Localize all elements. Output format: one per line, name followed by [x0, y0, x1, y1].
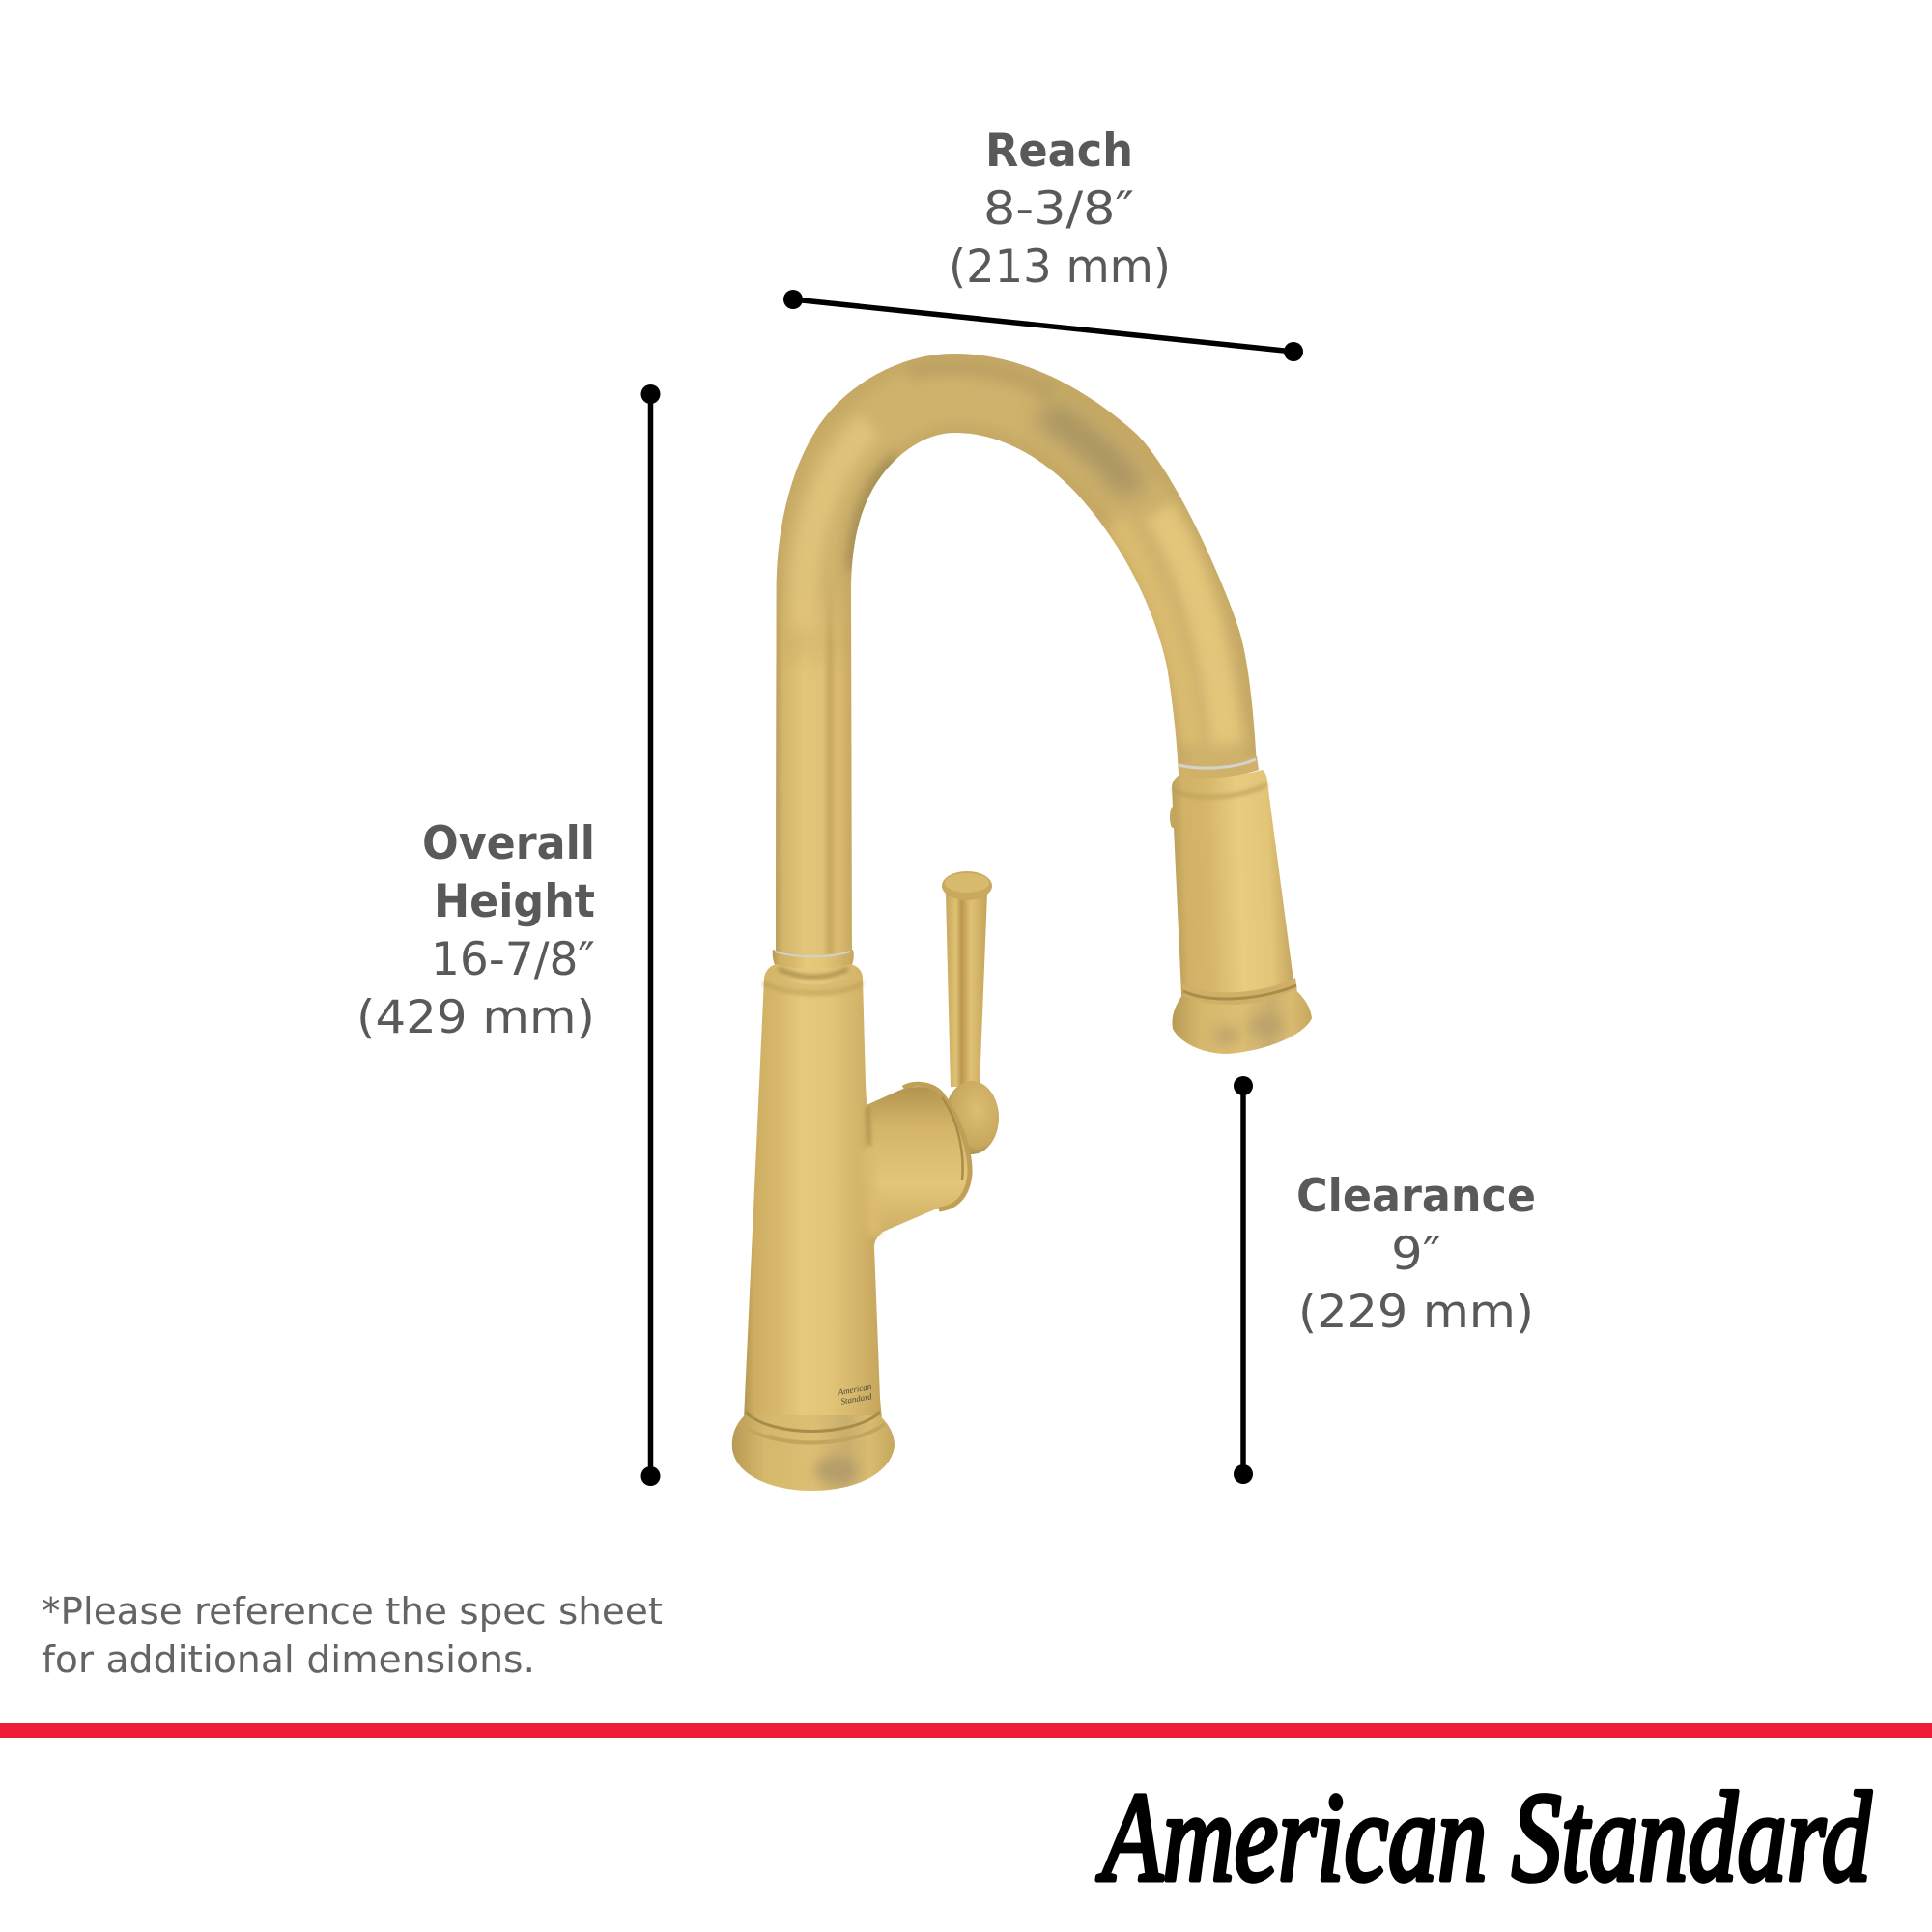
label: reach: Reach: [985, 125, 1133, 178]
label: overall height: (429 mm): [356, 991, 595, 1044]
label: clearance: (229 mm): [1298, 1286, 1534, 1339]
label: clearance: [1296, 1170, 1536, 1339]
icon: small logo on base: American: [837, 1381, 872, 1397]
label: reach: (213 mm): [949, 241, 1171, 294]
icon: handle arm: [867, 1084, 970, 1247]
red divider bar: [0, 1723, 1932, 1738]
icon: handle knob: [945, 1081, 999, 1154]
dimension line: overall height: [641, 384, 661, 1486]
icon: small logo on base: [837, 1381, 874, 1406]
label: overall height: Overall: [422, 817, 595, 870]
footnote: for additional dimensions.: [42, 1638, 535, 1681]
label: clearance: Clearance: [1296, 1170, 1536, 1223]
footnote: [42, 1590, 663, 1681]
icon: faucet body: [744, 964, 882, 1420]
icon: base flare: [732, 1412, 895, 1491]
label: overall height: [356, 817, 595, 1044]
icon: spray head: [1170, 756, 1297, 1014]
faucet illustration: [732, 354, 1312, 1491]
label: clearance: 9″: [1391, 1228, 1441, 1281]
icon: faucet collar: [773, 950, 854, 972]
icon: spray head flare: [1172, 989, 1312, 1054]
label: overall height: 16-7/8″: [431, 933, 595, 986]
label: overall height: Height: [434, 875, 595, 928]
dimension line: reach: [783, 290, 1303, 361]
icon: small logo on base: Standard: [840, 1391, 873, 1406]
icon: handle lever: [942, 871, 992, 1087]
icon: faucet spout: [776, 354, 1257, 966]
footnote: *Please reference the spec sheet: [42, 1590, 663, 1633]
label: reach: 8-3/8″: [983, 183, 1134, 236]
dimension line: clearance: [1234, 1076, 1253, 1484]
label: reach: [949, 125, 1171, 294]
